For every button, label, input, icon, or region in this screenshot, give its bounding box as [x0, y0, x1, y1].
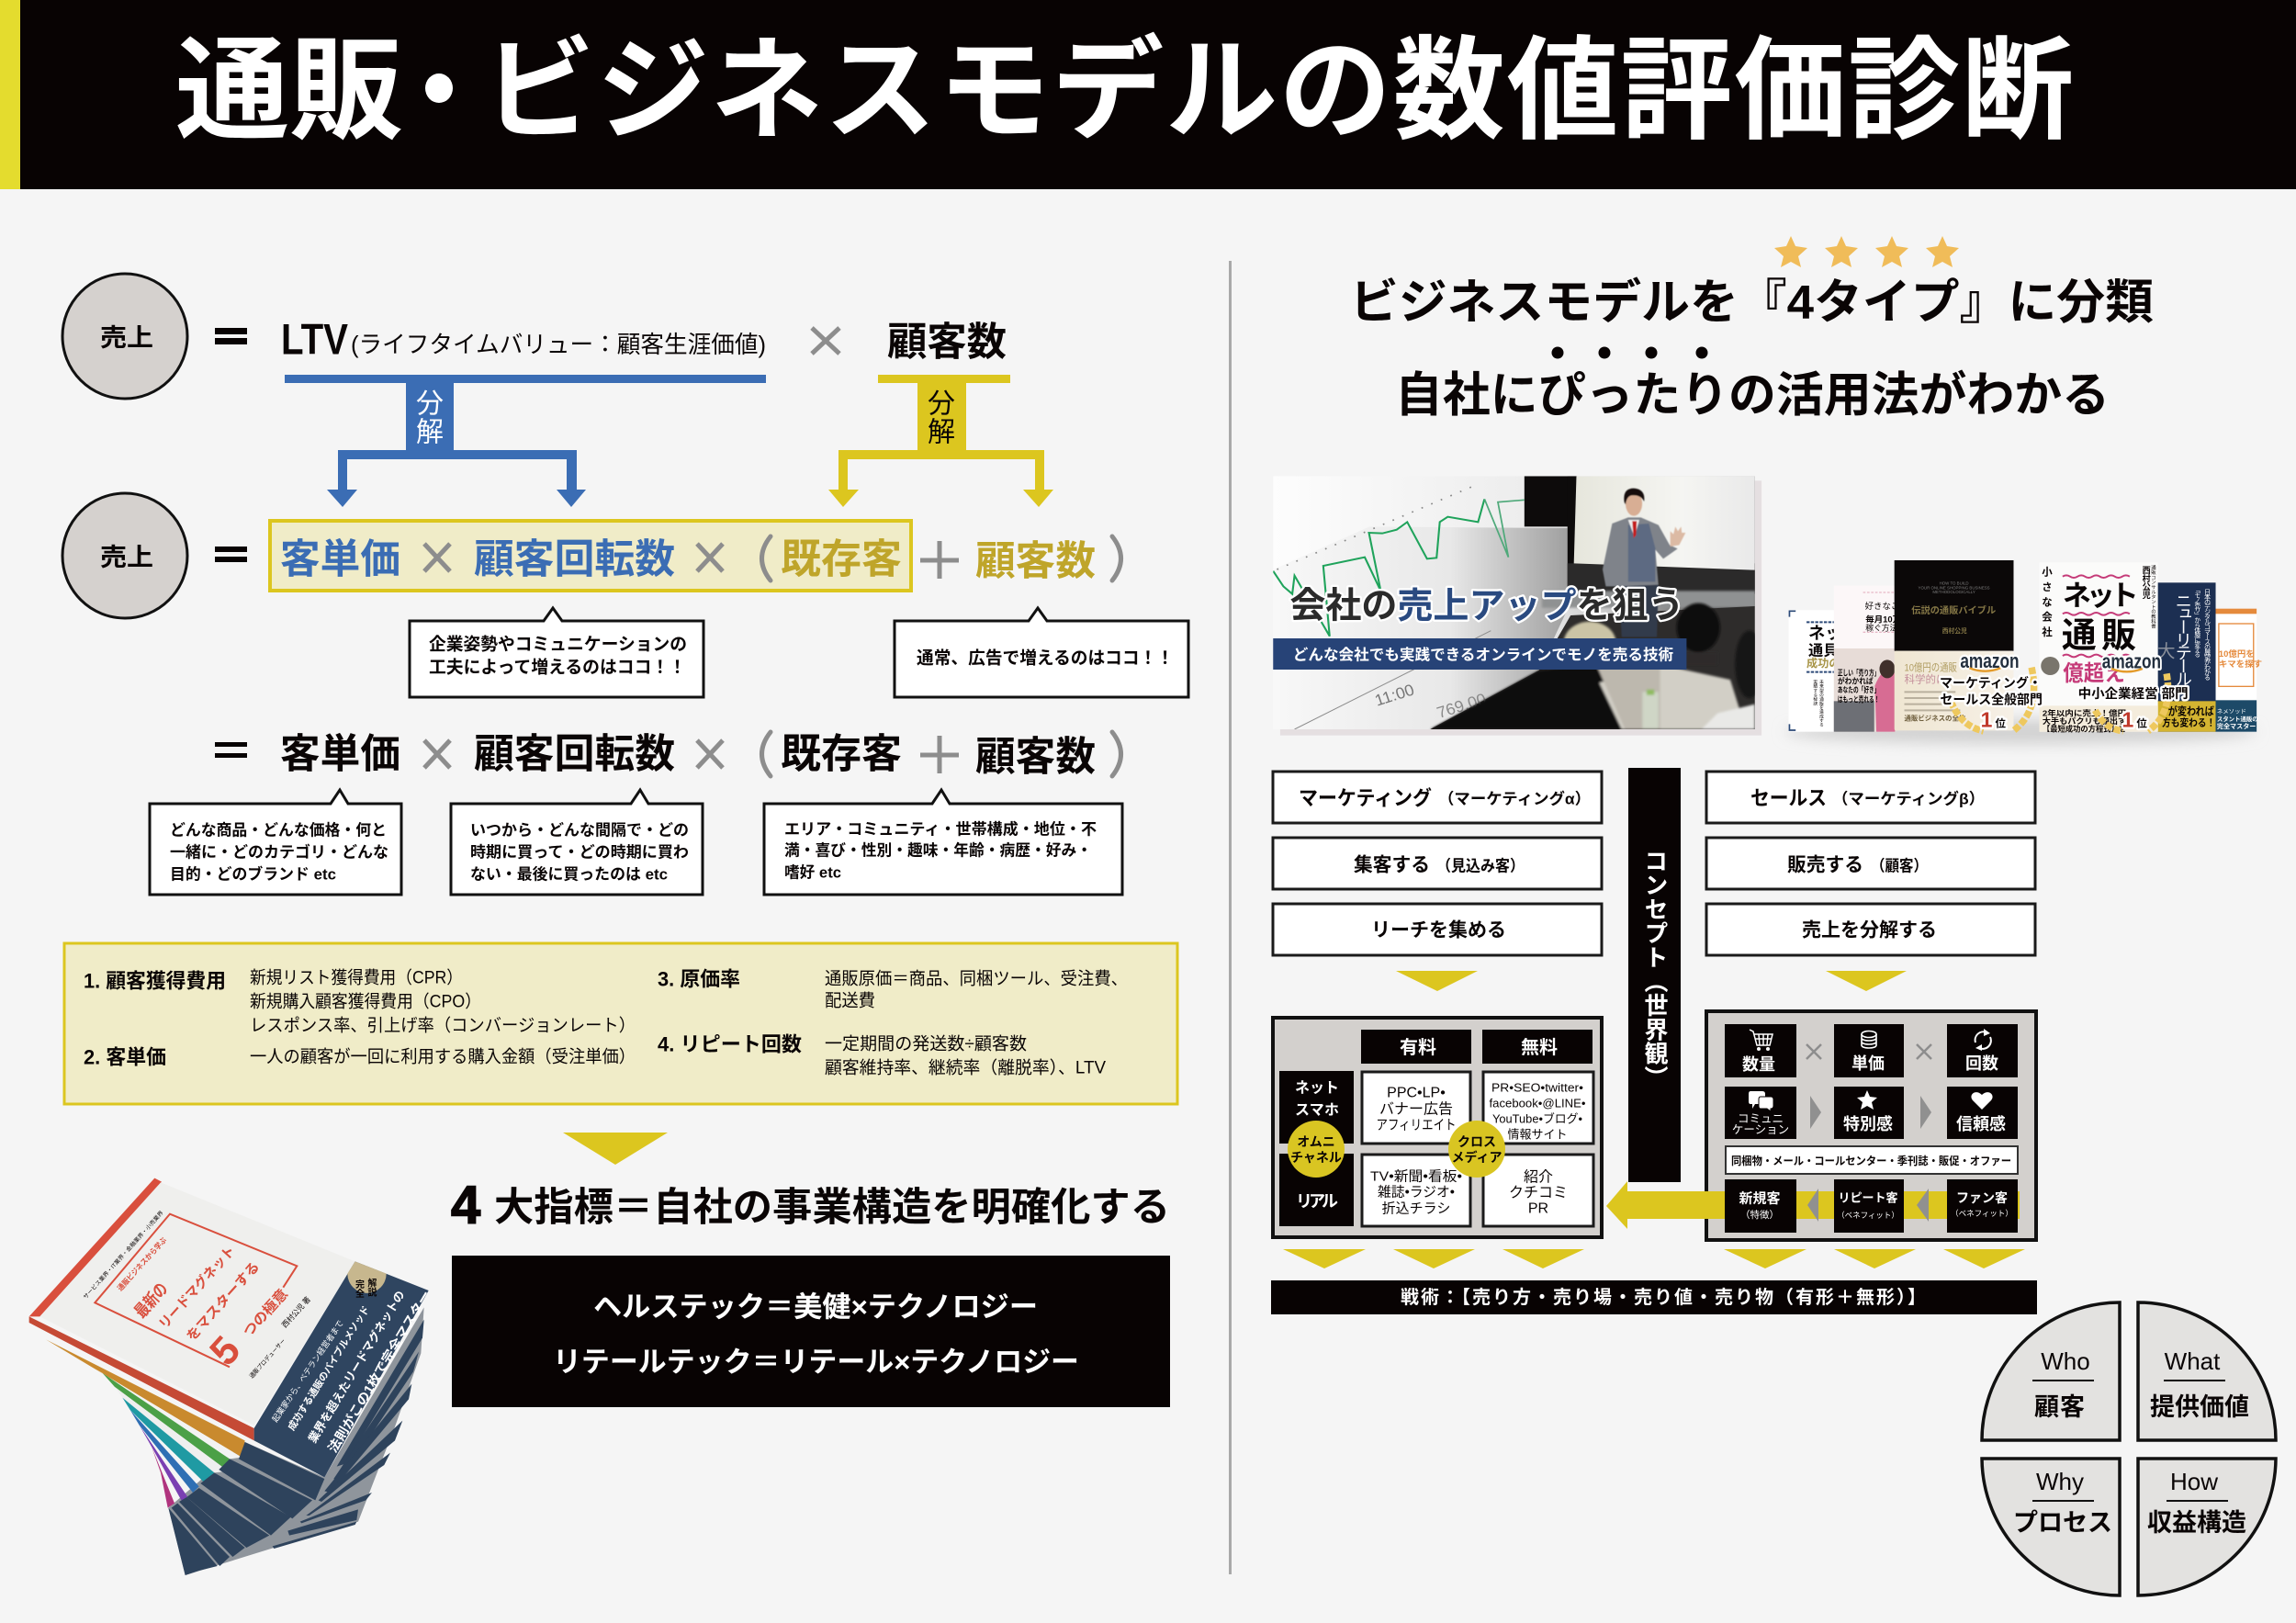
cell: quantity: [1725, 1024, 1796, 1077]
cell: fans: （ベネフィット）: [1951, 1209, 2013, 1218]
header: free: 無料: [1521, 1037, 1558, 1058]
arrow: right triangle: [1826, 971, 1907, 991]
award: marketing and sales: amazon: [1960, 649, 2020, 672]
sign: multiply: [1917, 1044, 1931, 1059]
callout: frequency questions: 時期に買って・どの時期に買わ: [470, 843, 689, 862]
arrow: yellow decomposition: 解: [928, 417, 955, 448]
award: small business: 中小企業経営 部門: [2078, 686, 2189, 701]
box: sales: （マーケティングβ）: [1832, 790, 1985, 808]
room below screen: [1568, 563, 1756, 594]
arrow: blue decomposition: [285, 375, 766, 507]
seal: [347, 1261, 387, 1298]
panel: tech definitions: ヘルステック＝美健×テクノロジー: [593, 1291, 1038, 1323]
book 6: ネメソッド: [2217, 708, 2246, 715]
callout: frequency questions: いつから・どんな間隔で・どの: [470, 821, 689, 840]
red spine: [29, 1178, 162, 1316]
chart line: [1273, 499, 1484, 637]
book 1: ネッ: [1808, 624, 1842, 642]
existing customers: 既存客: [781, 536, 902, 582]
panel: sales decomposition: [1606, 1011, 2036, 1240]
indicator 2: 一人の顧客が一回に利用する購入金額（受注単価）: [250, 1047, 636, 1067]
concept column: コンセプト（世界観）: [1641, 849, 1669, 1089]
book 3: HOW TO BUILD: [1940, 581, 1969, 585]
book 2: がわかれば: [1838, 676, 1874, 686]
badge: cross media: メディア: [1451, 1150, 1503, 1165]
coloured fanned spines: [46, 1339, 245, 1508]
box: marketing: [1273, 772, 1602, 823]
indicator 1: レスポンス率、引上げ率（コンバージョンレート）: [250, 1016, 636, 1036]
purchase frequency: 顧客回転数: [474, 536, 675, 582]
cell: free real: [1483, 1155, 1593, 1226]
callout: unit price questions: どんな商品・どんな価格・何と: [170, 821, 387, 840]
title: 通販: [175, 28, 403, 153]
title: ビジネスモデルの数値評価診断: [483, 28, 2074, 153]
box: gather reach: [1273, 904, 1602, 955]
book 1: 実績する秘訣: [1813, 679, 1818, 706]
purchase frequency: 顧客回転数: [474, 731, 675, 777]
book 2: 毎月10万: [1865, 614, 1901, 624]
cover title text: 最新の: [130, 1279, 172, 1322]
cell: fans: [1947, 1179, 2018, 1233]
indicator 1: 新規購入顧客獲得費用（CPO）: [250, 992, 481, 1012]
formula row 3: [215, 731, 1120, 779]
book 2: 稼ぐ方法: [1865, 622, 1898, 632]
box: sales: [1706, 772, 2035, 823]
book 5: ニューリテール: [2174, 592, 2192, 687]
badge: omni channel: オムニ: [1297, 1134, 1335, 1149]
illustration: book stack: [29, 1178, 433, 1575]
cell: paid net: バナー広告: [1379, 1100, 1453, 1117]
indicator 4: 4. リピート回数: [658, 1032, 802, 1056]
tactics bar: 戦術：【売り方・売り場・売り値・売り物（有形＋無形）】: [1401, 1286, 1926, 1308]
badge: cross media: クロス: [1458, 1134, 1496, 1149]
circle: sales: 売上: [100, 544, 153, 571]
header: free: [1482, 1030, 1593, 1064]
equals sign: [215, 547, 247, 562]
callout: company effort: 工夫によって増えるのはココ！！: [429, 658, 686, 678]
book 1: 未来型の通販を達成する: [1819, 679, 1824, 727]
award: marketing and sales: マーケティング・: [1940, 675, 2042, 690]
illustration: book stack: サービス業界・IT業界・金融業界・小売業界: [82, 1210, 165, 1301]
arrow: flow back to media: [1606, 1181, 2020, 1229]
book 5: 日本のデジタルコマースの展望がわかる: [2204, 589, 2211, 681]
quadrant: what: 提供価値: [2150, 1393, 2249, 1421]
book 4: 【最短成功の方程式】を: [2043, 724, 2126, 733]
cell: communication: コミュニ: [1738, 1112, 1784, 1125]
circle: sales: [62, 493, 187, 618]
row: net: [1279, 1071, 1354, 1144]
arrow: yellow decomposition: 分: [928, 389, 955, 419]
indicator 1: [84, 968, 636, 1036]
header: paid: [1361, 1030, 1471, 1064]
book 2: [1834, 586, 1908, 732]
box: decompose sales: [1706, 904, 2035, 955]
callout: customer attributes: [764, 790, 1122, 895]
book 4: 西村公児: [2141, 566, 2151, 600]
sign: multiply: [1806, 1044, 1821, 1059]
callout: ads: 通常、広告で増えるのはココ！！: [917, 648, 1174, 669]
callout: customer attributes: エリア・コミュニティ・世帯構成・地位・不: [784, 819, 1097, 838]
seal: 解説: [366, 1277, 377, 1297]
callout: customer attributes: 満・喜び・性別・趣味・年齢・病歴・好み・: [784, 841, 1092, 860]
book 1: 成功の: [1806, 656, 1840, 670]
cell: free real: クチコミ: [1509, 1185, 1568, 1201]
box: gather reach: リーチを集める: [1371, 920, 1506, 941]
heading: four indicators clarify business: [451, 1176, 1170, 1234]
callout: unit price questions: 一緒に・どのカテゴリ・どんな: [170, 843, 388, 862]
photo: seminar speaker banner: [1273, 476, 1764, 736]
arrow: yellow decomposition: [828, 375, 1053, 507]
book 3: 10億円の通販: [1905, 661, 1957, 673]
strip: touchpoints: [1726, 1146, 2018, 1174]
book 3: [1895, 560, 2013, 730]
illustration: book stack: リードマグネット: [155, 1243, 239, 1332]
indicator 3: 配送費: [825, 990, 875, 1010]
banner headline: 会社の売上アップを狙う: [1289, 585, 1684, 626]
row: net: スマホ: [1295, 1102, 1339, 1119]
book 3: 西村公児: [1942, 626, 1967, 635]
highlighted box: [270, 521, 911, 591]
cell: frequency: 回数: [1965, 1054, 1998, 1073]
book 4: 大手もパクリも願出す: [2043, 716, 2126, 726]
unit price: 客単価: [280, 536, 400, 582]
cell: free real: PR: [1528, 1201, 1548, 1216]
photo: seminar speaker banner: 769.00: [1435, 690, 1489, 722]
illustration: book stack: 法則がこの1枚で完全マスター: [325, 1288, 433, 1455]
book 3: 科学的に: [1905, 673, 1946, 686]
cell: paid real: [1362, 1155, 1470, 1226]
award: marketing and sales: 1: [1981, 707, 1993, 731]
cell: repeat customers: （ベネフィット）: [1837, 1211, 1899, 1220]
cell: repeat customers: [1834, 1179, 1904, 1233]
book 3: 伝説の通販バイブル: [1911, 604, 1996, 616]
new customers: 顧客数: [975, 735, 1096, 779]
book 5: 方も変わる！: [2162, 717, 2215, 729]
cell: free net: YouTube•ブログ•: [1492, 1111, 1582, 1126]
divider: [1229, 261, 1232, 1574]
indicator 1: 1. 顧客獲得費用: [84, 970, 226, 992]
indicator 2: [84, 1045, 636, 1069]
box: attract customers: [1273, 838, 1602, 889]
book 2: 正しい「売り方」: [1838, 668, 1879, 678]
badge: omni channel: チャネル: [1290, 1150, 1342, 1165]
illustration: book stack: 成功する通販のバイブルメソッド: [286, 1304, 372, 1433]
new customers: 顧客数: [975, 538, 1096, 584]
box: attract customers: （見込み客）: [1436, 856, 1525, 874]
equals sign: [215, 328, 247, 344]
cell: special feeling: [1834, 1087, 1904, 1139]
cell: special feeling: 特別感: [1843, 1114, 1893, 1133]
callout: customer attributes: 嗜好 etc: [784, 863, 841, 882]
axis line: [1295, 631, 1491, 729]
book 6: スタント通販の: [2217, 715, 2258, 723]
cell: free net: facebook•@LINE•: [1490, 1097, 1586, 1110]
badge: cross media: [1448, 1121, 1505, 1178]
cell: free net: PR•SEO•twitter•: [1491, 1080, 1583, 1095]
formula row 2: decomposed: [62, 493, 1120, 618]
chevron: [1807, 1189, 1818, 1222]
quadrant: who: 顧客: [2034, 1393, 2086, 1421]
indicator 3: [658, 968, 1128, 1010]
cell: trust: [1947, 1087, 2018, 1139]
box: marketing: （マーケティングα）: [1438, 790, 1591, 808]
band text: 起業家から、ベテラン経営者まで: [269, 1318, 345, 1424]
cell: free net: 情報サイト: [1507, 1128, 1568, 1141]
down triangles to tactics: [1283, 1249, 2025, 1268]
book 4: 億超え: [2063, 661, 2125, 686]
cell: communication: ケーション: [1732, 1123, 1789, 1136]
callout: company effort: [410, 608, 703, 697]
award: small business: 位: [2136, 717, 2147, 730]
header: paid: 有料: [1400, 1037, 1436, 1058]
heading: four indicators clarify business: 4: [451, 1176, 480, 1234]
illustration: book stack: をマスターする: [184, 1259, 263, 1345]
badge: omni channel: [1288, 1121, 1345, 1178]
quadrant: who: Who: [2041, 1347, 2090, 1375]
award: marketing and sales: セールス全般部門: [1940, 693, 2043, 707]
quadrant: why: [1982, 1459, 2120, 1595]
strip: touchpoints: 同梱物・メール・コールセンター・季刊誌・販促・オファー: [1731, 1154, 2011, 1167]
LTV explanation: (ライフタイムバリュー：顧客生涯価値): [351, 331, 766, 358]
seal: 完全: [353, 1279, 364, 1298]
quadrant: how: [2138, 1459, 2276, 1595]
book 6: キマを探す: [2219, 659, 2262, 669]
book 1: 通貝: [1808, 642, 1839, 659]
book 3: 通販ビジネスの全体: [1905, 715, 1966, 722]
customers label: 顧客数: [887, 321, 1007, 365]
navy band: [254, 1261, 429, 1477]
cell: paid net: アフィリエイト: [1376, 1117, 1457, 1133]
book 4: 通販コンサルタントの教科書: [2150, 564, 2156, 630]
box: marketing: マーケティング: [1299, 786, 1432, 810]
projection screen: [1574, 476, 1755, 570]
indicator 4: 顧客維持率、継続率（離脱率）、LTV: [825, 1058, 1106, 1078]
indicator 1: 新規リスト獲得費用（CPR）: [250, 968, 463, 988]
light chart panel: [1387, 527, 1568, 729]
cell: fans: ファン客: [1956, 1190, 2008, 1205]
axis labels: 11:00: [1372, 681, 1417, 709]
indicator 3: 3. 原価率: [658, 968, 740, 990]
tactics bar: [1271, 1280, 2037, 1314]
box: sell: [1706, 838, 2035, 889]
cell: communication: [1725, 1087, 1796, 1139]
panel: media matrix: [1273, 1018, 1602, 1237]
book 5: 大: [2157, 641, 2176, 661]
cell: free net: [1483, 1072, 1593, 1144]
book 4: 2年以内に売上！億円: [2043, 709, 2126, 718]
audience: [1430, 603, 1764, 729]
arrow: blue decomposition: 分: [416, 389, 444, 419]
unit price: 客単価: [280, 731, 400, 777]
book 2: はもっと売れる！: [1838, 693, 1879, 704]
cell: paid net: [1362, 1072, 1470, 1144]
quadrant: how: How: [2170, 1468, 2218, 1495]
row: real: リアル: [1296, 1192, 1338, 1211]
illustration: award books: [1784, 560, 2262, 744]
box: sales: セールス: [1750, 786, 1827, 810]
book 6: 完全マスター: [2217, 722, 2256, 730]
book 6: 10億円を: [2219, 648, 2255, 659]
book 2: あなたの「好き」: [1838, 684, 1879, 694]
cell: trust: 信頼感: [1956, 1114, 2006, 1133]
book 3: METHODOLOGICALLY: [1932, 590, 1975, 594]
chevron: [1917, 1189, 1929, 1222]
book 2: 好きなこと: [1865, 601, 1908, 611]
arrow: left triangle: [1396, 971, 1478, 991]
panel: tech definitions: リテールテック＝リテール×テクノロジー: [553, 1347, 1079, 1378]
book 5: [2157, 582, 2216, 732]
book 1: [1788, 610, 1842, 732]
book 5: が変われば: [2168, 705, 2214, 717]
book 4: [2040, 562, 2158, 733]
box: decompose sales: 売上を分解する: [1802, 920, 1937, 941]
arrow: down triangle: [563, 1133, 668, 1165]
heading: four types: ビジネスモデルを『4タイプ』に分類: [1350, 276, 2154, 330]
header band: [0, 0, 2296, 189]
cover frame: [95, 1214, 297, 1367]
banner strip: どんな会社でも実践できるオンラインでモノを売る技術: [1293, 646, 1673, 664]
indicator 4: [658, 1032, 1106, 1078]
emphasis dots: [1552, 347, 1708, 358]
book 4: 小さな会社: [2041, 567, 2053, 637]
cell: paid real: 雑誌•ラジオ•: [1378, 1185, 1455, 1200]
cell: free real: 紹介: [1524, 1168, 1553, 1185]
callout: unit price questions: [150, 790, 401, 895]
cell: repeat customers: リピート客: [1838, 1190, 1898, 1205]
callout: ads: [895, 608, 1188, 697]
front cover: [39, 1182, 355, 1426]
circle: sales: [62, 274, 187, 399]
quadrant: why: Why: [2036, 1468, 2084, 1495]
book 5: 「モノ売り」から体験に変える: [2193, 587, 2200, 658]
callout: frequency questions: [451, 790, 703, 895]
award: marketing and sales: [1940, 649, 2043, 731]
cell: new customers: （特徴）: [1740, 1209, 1779, 1221]
concept column: [1628, 768, 1681, 1182]
formula row 1: sales = LTV x customers: [62, 274, 1007, 399]
box: sell: （顧客）: [1871, 856, 1928, 874]
illustration: book stack: 業界を超えたリードマグネットの: [305, 1288, 408, 1446]
book 4: 通販: [2062, 616, 2136, 655]
cell: frequency: [1947, 1024, 2018, 1077]
heading: four indicators clarify business: 大指標＝自社の事業構造を明確化する: [494, 1186, 1170, 1230]
cell: unit price: [1834, 1024, 1904, 1077]
cell: unit price: 単価: [1851, 1054, 1885, 1073]
illustration: book stack: 西村公児 著: [280, 1295, 312, 1329]
book 3: YOUR ONLINE SHOPPING BUSINESS: [1919, 586, 1990, 590]
row: real: [1279, 1154, 1354, 1226]
indicator 2: 2. 客単価: [84, 1045, 166, 1069]
stars: [1774, 236, 1959, 267]
quadrant: how: 収益構造: [2147, 1509, 2246, 1537]
cell: quantity: 数量: [1742, 1055, 1775, 1074]
box: sell: 販売する: [1787, 854, 1863, 876]
cell: new customers: 新規客: [1739, 1190, 1781, 1207]
multiply sign: [812, 328, 839, 354]
award: small business: amazon: [2102, 650, 2161, 672]
panel: tech definitions: [452, 1256, 1170, 1407]
heading: fit to your company: 自社にぴったりの活用法がわかる: [1395, 369, 2110, 423]
book 4: ネット: [2063, 580, 2139, 612]
banner strip: [1273, 638, 1686, 670]
existing customers: 既存客: [781, 731, 902, 777]
quadrant: why: プロセス: [2013, 1509, 2112, 1537]
indicator 4: 一定期間の発送数÷顧客数: [825, 1034, 1027, 1054]
indicator 3: 通販原価＝商品、同梱ツール、受注費、: [825, 968, 1128, 988]
chevron: [1920, 1096, 1931, 1129]
chevron: [1810, 1096, 1821, 1129]
row: net: ネット: [1295, 1080, 1339, 1097]
cell: paid net: PPC•LP•: [1387, 1086, 1446, 1100]
box: attract customers: 集客する: [1354, 854, 1430, 876]
cell: paid real: 折込チラシ: [1382, 1201, 1450, 1216]
award: marketing and sales: 位: [1996, 717, 2007, 730]
cell: paid real: TV•新聞•看板•: [1370, 1168, 1462, 1185]
navy spine fan: [168, 1320, 424, 1575]
illustration: book stack: 通販ビジネスから学ぶ: [116, 1234, 169, 1292]
callout: frequency questions: ない・最後に買ったのは etc: [470, 865, 668, 884]
illustration: book stack: 5: [201, 1328, 249, 1374]
quadrant: who: [1982, 1302, 2120, 1440]
callout: company effort: 企業姿勢やコミュニケーションの: [429, 634, 687, 654]
illustration: book stack: 通販プロデューサー: [247, 1336, 287, 1380]
cell: new customers: [1725, 1179, 1796, 1233]
quadrant: what: What: [2165, 1347, 2221, 1375]
LTV label: LTV: [281, 314, 349, 364]
callout: unit price questions: 目的・どのブランド etc: [170, 865, 336, 884]
speaker: [1603, 489, 1685, 637]
quadrant: what: [2138, 1302, 2276, 1440]
arrow: blue decomposition: 解: [416, 417, 444, 448]
circle: sales: 売上: [100, 324, 153, 352]
panel: four indicators: [64, 943, 1177, 1104]
illustration: book stack: つの極意: [240, 1286, 291, 1340]
award: small business: 1: [2122, 707, 2134, 731]
award: small business: [2078, 650, 2189, 731]
page block: [168, 1307, 424, 1575]
book 6: [2215, 609, 2262, 732]
